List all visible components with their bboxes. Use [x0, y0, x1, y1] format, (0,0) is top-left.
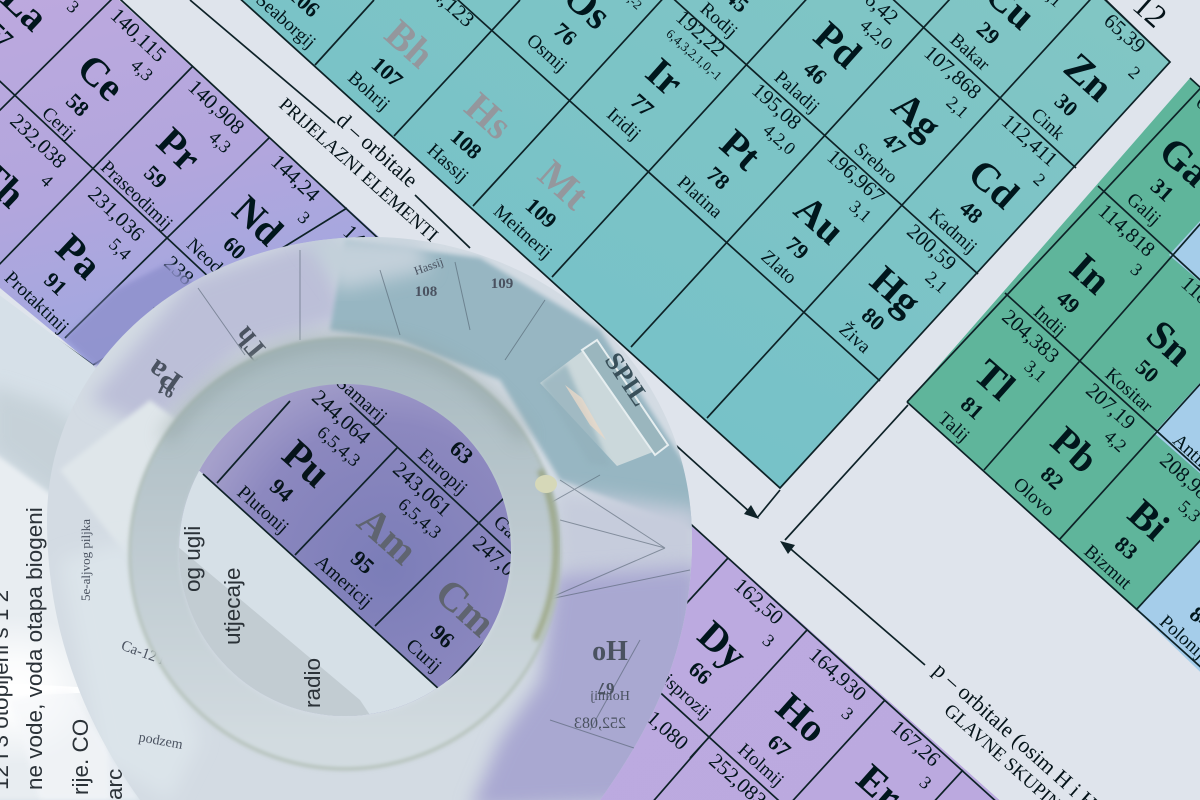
cell: Cu	[939, 0, 1083, 83]
cell: Ho: 3	[838, 703, 858, 724]
label: d-orbitale arrow	[190, 0, 780, 519]
panel: flask mouth ring	[132, 340, 558, 767]
mirrored reflections of the table: 108	[415, 284, 437, 300]
cell: Th: 232,038	[5, 109, 72, 173]
cell: Bi: Bi	[1120, 490, 1178, 549]
cell: Pt: 4,2,0	[759, 120, 800, 159]
cell: Cd: Kadmij	[924, 205, 981, 258]
cell: Dy	[648, 571, 795, 724]
flask shadow on purple block	[65, 262, 195, 372]
lens band text	[180, 526, 325, 708]
heading: prijelazni elementi: PRIJELAZNI ELEMENTI	[275, 94, 442, 246]
cell: Hs	[422, 83, 522, 187]
green block background	[907, 78, 1200, 610]
cell: Pa: Pa	[47, 225, 111, 288]
cell: Pa: 5,4	[105, 234, 135, 264]
cell: Ir: 192,22	[671, 5, 730, 61]
cell: Os: 76	[549, 17, 582, 51]
cell: Sn: 50	[1131, 354, 1164, 388]
cell: Cu: 29	[972, 16, 1005, 50]
cell: Pa: 231,036	[83, 182, 150, 246]
cell: In	[1015, 199, 1163, 352]
cell: Ir: Iridij	[602, 104, 645, 145]
page text lines: rije. CO	[68, 719, 93, 795]
cell: Bh: Bh	[377, 11, 443, 77]
cell: Tl: 81	[956, 391, 989, 425]
cell: Sn: Sn	[1138, 311, 1200, 374]
cell: Dy: 66	[684, 656, 717, 690]
cell: Tl: Tl	[966, 350, 1024, 409]
page text lines: arc	[102, 769, 127, 800]
cell: Os	[517, 0, 645, 87]
cell: Ag: 107,868	[919, 40, 986, 104]
grid lines	[236, 0, 1170, 488]
cell: Cd: 112,411	[997, 109, 1063, 171]
cell: Zn: Cink	[1027, 104, 1069, 145]
cell: Ir: 6,4,3,2,1,0,-1	[663, 26, 725, 83]
mirrored reflections of the table: Holmij	[590, 689, 630, 704]
reflected label	[540, 340, 668, 466]
cell: Bh: 107	[367, 52, 408, 92]
cell: La	[0, 0, 83, 69]
flask facet lines	[198, 250, 690, 760]
cell: Cu: Bakar	[946, 29, 994, 76]
lens cell: Pu: 6,5,4,3	[313, 422, 364, 471]
mirrored reflections of the table: 67	[597, 679, 614, 698]
grid lines	[630, 478, 1000, 800]
lens cell: Pu: 244,064	[307, 385, 375, 449]
panel: p-block metals, green	[907, 78, 1200, 680]
cell: Ag	[841, 40, 989, 194]
mirrored reflections of the table: f	[616, 751, 656, 794]
cell: Cd: Cd	[960, 150, 1028, 217]
cell: Th	[0, 109, 74, 261]
cell: Ce: 58	[61, 88, 94, 121]
lens band text: og ugli	[180, 526, 205, 592]
cell: Pr: 4,3	[205, 127, 235, 157]
cell: Pd: Pd	[805, 12, 870, 77]
cell: Nd: Neodimij	[182, 234, 249, 299]
cell: Ga	[1113, 90, 1200, 234]
page text lines	[0, 507, 127, 800]
cell: Cd: 48	[955, 195, 988, 229]
lens cell: Eu: 63	[445, 435, 478, 469]
ring olive outer edge	[132, 341, 558, 767]
cell: Zn: Zn	[1056, 44, 1122, 110]
cell: Zn	[1021, 8, 1161, 155]
panel: p-block blue metalloids	[1136, 148, 1200, 720]
panel: text page under the flask, lower left	[0, 288, 200, 800]
cell: Tl	[919, 304, 1067, 458]
cell: Ce: 4,3	[127, 55, 157, 85]
cell: Au: Au	[786, 186, 854, 253]
cell: Ga: Galij	[1122, 189, 1165, 230]
reflected label: SPIL	[599, 347, 655, 411]
cell: Nd: Nd	[224, 186, 292, 254]
cell: Bi: Bizmut	[1080, 541, 1136, 594]
cell: Pr: 59	[139, 160, 172, 193]
mirrored reflections of the table: Th	[228, 320, 274, 367]
cell: Hg: 2,1	[921, 267, 952, 297]
cell: Th: 4	[37, 170, 57, 191]
cell: Bi: 83	[1110, 531, 1143, 565]
mirrored reflections of the table: podzem	[137, 730, 184, 753]
cell: Ce: 140,115	[106, 3, 171, 67]
cell: In: Indij	[1029, 302, 1070, 341]
panel: glass flask	[40, 230, 700, 800]
cell: Zn: 30	[1050, 88, 1083, 122]
page text lines: ne vode, voda otapa biogeni	[22, 507, 47, 790]
cell: Ce: Cerij	[37, 103, 79, 144]
cell: Ho: 67	[763, 729, 796, 763]
lens cell: Pu: Plutonij	[233, 482, 292, 538]
lens cell: Cm: 96	[426, 619, 459, 653]
panel: lanthanides and actinides, upper left	[0, 0, 470, 400]
lens cell: Pu: 94	[265, 473, 298, 507]
cell: Au: 3,1	[845, 196, 876, 226]
cell: U: U	[129, 299, 181, 352]
panel: lens view through flask mouth	[179, 384, 511, 716]
cell: Pb: 4,2	[1100, 426, 1131, 456]
lens cell: Am	[314, 462, 450, 610]
mirrored reflections of the table: 109	[491, 276, 513, 292]
cell: Ir: Ir	[637, 49, 692, 105]
panel: lanthanides and actinides, lower right	[560, 478, 1005, 800]
ring inner olive edge	[535, 470, 556, 640]
cell: Pd: 46	[799, 56, 832, 90]
cell: Ce	[25, 3, 174, 155]
cell: U: 6	[191, 312, 211, 333]
cell: Nd: 60	[218, 231, 251, 264]
cell: Hs: 108	[446, 124, 487, 164]
lens cell: Am: 95	[346, 545, 379, 579]
cell: Ho: Ho	[768, 684, 836, 751]
lens cell: Cm: 247,070	[468, 531, 536, 595]
cell: Ir: 77	[626, 88, 659, 122]
cell: Pm: 144,913	[338, 220, 405, 284]
lens band text: utjecaje	[220, 567, 245, 645]
cell: Bh	[334, 0, 479, 120]
cell: Zn: 2	[1125, 62, 1145, 83]
cell: Bi	[1077, 448, 1200, 598]
lens cell: Pu	[236, 390, 370, 536]
cell: Cf: 251,080	[626, 691, 693, 755]
grey sheet in lens	[179, 548, 369, 716]
mirrored reflections of the table: 91	[154, 378, 177, 402]
lens cell: Cm: Curij	[402, 635, 445, 677]
white page band in lens	[179, 470, 437, 716]
cell: Ho: 164,930	[804, 642, 871, 706]
cell: Hg: Živa	[835, 318, 876, 358]
cell: Mt: Mt	[530, 151, 598, 219]
paper shadow corner	[0, 385, 160, 540]
cell: In: 3	[1127, 259, 1147, 280]
cell: Ag: 47	[878, 127, 911, 161]
teal block background	[236, 0, 1170, 488]
cell: Au: 196,967	[822, 144, 889, 208]
cell: Ga: 31	[1146, 173, 1179, 207]
page sheet	[0, 288, 200, 800]
cell: Sn	[1098, 271, 1200, 417]
cell: Tl: 3,1	[1020, 356, 1051, 386]
lens cell: Gd: Gadolinij	[489, 512, 558, 576]
cell: Pb: 207,19	[1081, 378, 1140, 434]
cell: Mt: Meitnerij	[489, 201, 556, 264]
cell: In: 49	[1052, 285, 1085, 319]
cell: Dy: Dy	[690, 612, 756, 678]
cell: Zn: 65,39	[1099, 8, 1150, 58]
flask refraction colours	[60, 232, 700, 800]
grid lines	[0, 0, 380, 400]
cell: Mt: 109	[521, 193, 562, 233]
cell: Nd: 144,24	[266, 149, 325, 207]
cell: Hg: Hg	[862, 257, 930, 324]
lens cell: Cm: Cm	[427, 570, 504, 645]
lens cell: Am: Americij	[311, 551, 376, 613]
cell: Hg: 200,59	[902, 219, 961, 275]
cell: Hg	[824, 219, 968, 369]
cell: Au: Zlato	[757, 246, 801, 289]
cell: Tl: Talij	[934, 408, 973, 447]
cell: Mt	[489, 145, 606, 264]
cell: Pt	[669, 78, 816, 231]
purple block background	[560, 478, 1005, 800]
mirrored reflections of the table: Ho	[592, 636, 628, 667]
purple block background	[0, 0, 470, 365]
cell: Ag: Srebro	[850, 139, 902, 188]
paper bright area	[0, 450, 110, 800]
cell: Hs: Hassij	[423, 140, 472, 187]
cell: Nd	[182, 147, 332, 299]
label: p-orbitale arrow	[780, 405, 925, 665]
cell: In: In	[1062, 244, 1120, 303]
cell: Dy: 162,50	[729, 573, 788, 629]
grid lines	[907, 78, 1200, 680]
cell: Pa: Protaktinij	[0, 267, 73, 338]
cell: Pd: Paladij	[770, 67, 823, 118]
ring glass	[155, 363, 535, 743]
heading: d-orbitale: d – orbitale	[332, 107, 423, 192]
cell: Cd: 2	[1030, 169, 1050, 190]
cell: Pb	[1003, 378, 1147, 528]
cell: Ho	[726, 642, 874, 796]
cell: Pd	[766, 0, 913, 126]
cell: Os: Osmij	[522, 30, 571, 77]
mirrored reflections of the table: Pa	[141, 353, 188, 399]
cell: Er	[842, 715, 952, 800]
cell: Rh	[692, 0, 794, 45]
cell: Pd: 4,2,0	[856, 15, 897, 54]
cell: Pr	[96, 69, 260, 235]
cell: Ir	[593, 5, 742, 159]
ring highlight	[535, 475, 557, 493]
cell: Sn: Kositar	[1101, 364, 1157, 417]
cell: Pb: 82	[1036, 461, 1069, 495]
cell: Pa: 91	[39, 267, 72, 300]
cell: Bh: Bohrij	[343, 67, 394, 115]
cell: Ag: Ag	[884, 83, 950, 149]
cell: Pt: Platina	[673, 172, 727, 223]
lens cell: Am: 243,061	[388, 457, 456, 521]
cell: Tl: 204,383	[997, 304, 1064, 368]
lens purple background	[175, 380, 515, 720]
ring dark top edge	[165, 340, 525, 440]
cell: Ho: Holmij	[734, 740, 788, 791]
lens cell: Cm	[408, 536, 510, 674]
glare streak	[0, 682, 130, 698]
lens band text: radio	[300, 658, 325, 708]
cell: Er: 167,26	[886, 715, 945, 771]
mirrored reflections of the table: Ca-12 i 38	[119, 638, 184, 675]
cell: Hg: 80	[857, 302, 890, 336]
cell: Pt: 195,08	[747, 78, 806, 134]
mirrored reflections of the table: 5e-aljvog piljka	[78, 519, 93, 601]
cell: Cd	[918, 109, 1066, 262]
arrowhead	[780, 541, 795, 554]
cell: Pb: Pb	[1042, 417, 1107, 482]
mirrored reflections of the table: 252,083	[574, 715, 626, 732]
cell: Au	[744, 144, 892, 298]
glare beam	[10, 690, 140, 800]
lens cell: Sm: Samarij	[332, 372, 391, 428]
cell: Er: 3	[916, 772, 936, 793]
rainbow reflection	[565, 385, 606, 440]
lens cell: Eu: Europij	[414, 445, 471, 499]
cell: Pt: 78	[702, 161, 735, 195]
cell: In: 114,818	[1094, 199, 1160, 262]
cell: U: 238,029	[159, 251, 226, 315]
cell: Dy: 3	[759, 630, 779, 651]
cell: Pa	[0, 180, 156, 338]
panel: d-block transition metals, teal	[236, 0, 1170, 488]
flask body	[40, 230, 700, 800]
cell: Pr: 140,908	[183, 75, 250, 139]
arrowhead	[744, 505, 759, 519]
lens grid lines	[202, 400, 511, 688]
lens cell: Am: 6,5,4,3	[394, 494, 445, 543]
cell: Pr: Pr	[148, 118, 210, 180]
lens cell: Pu: Pu	[274, 431, 339, 496]
mirrored reflections of the table	[82, 258, 630, 749]
cell: Pt: Pt	[712, 120, 770, 179]
sun glare	[0, 615, 101, 765]
cell: Pb: Olovo	[1009, 474, 1058, 521]
cell: Hs: Hs	[456, 83, 521, 148]
cell: Pr: Praseodimij	[96, 157, 177, 235]
lens cell: Am: Am	[349, 498, 426, 574]
cell: Dy: Disprozij	[648, 661, 715, 724]
mirrored reflections of the table: Hassij	[412, 255, 445, 278]
cell: Ag: 2,1	[942, 92, 973, 122]
cell: Ce: Ce	[69, 45, 133, 110]
cell: Nd: 3	[294, 207, 314, 228]
cell: U	[113, 251, 228, 366]
cell: Au: 79	[781, 231, 814, 265]
